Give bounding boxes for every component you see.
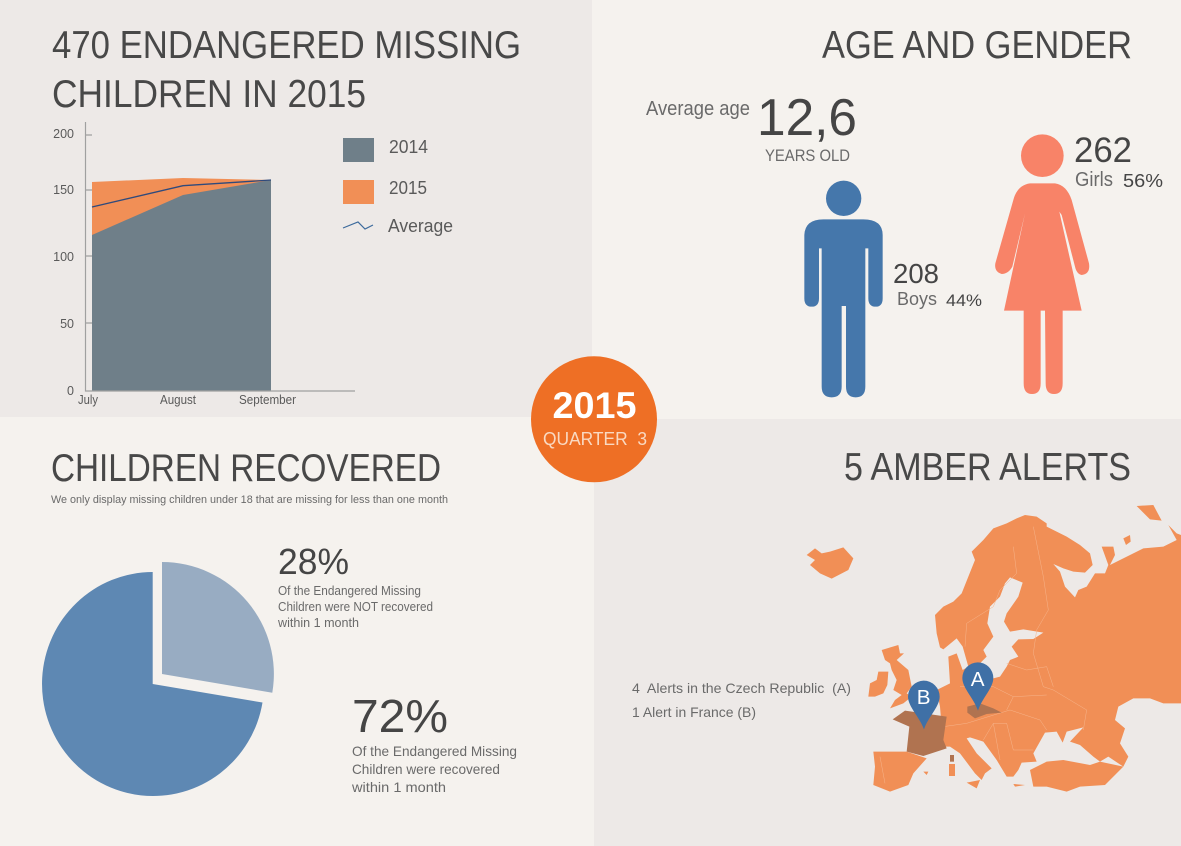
stat: 72 percent: 72% — [352, 690, 448, 742]
girls stats — [1074, 131, 1163, 191]
alerts list: 4 Alerts in the Czech Republic (A) — [632, 680, 851, 696]
boys stats: 44% — [946, 291, 982, 310]
highlighted countries — [893, 703, 1002, 762]
heading: endangered missing children: 470 ENDANGERED MISSING — [52, 24, 521, 67]
area chart: September — [239, 393, 296, 407]
stat: 28 percent: within 1 month — [277, 616, 359, 630]
heading: endangered missing children — [52, 24, 521, 116]
area chart: August — [160, 393, 196, 407]
chart legend — [343, 137, 453, 236]
map of Europe — [807, 505, 1181, 792]
badge: 2015 quarter 3 — [531, 356, 657, 482]
stat: 72 percent: within 1 month — [351, 779, 446, 795]
pie chart — [42, 562, 274, 796]
heading: children recovered: CHILDREN RECOVERED — [51, 447, 441, 490]
country borders — [880, 527, 1087, 783]
icon: boy figure — [804, 181, 883, 397]
girls stats: 262 — [1074, 131, 1132, 170]
badge: 2015 quarter 3: 2015 — [552, 385, 636, 426]
area chart: 50 — [60, 317, 74, 331]
average age: YEARS OLD — [765, 146, 850, 165]
average age: Average age — [646, 98, 750, 120]
panel: age and gender — [592, 0, 1181, 419]
chart legend: 2014 — [389, 137, 428, 157]
girls stats: 56% — [1123, 171, 1163, 191]
chart legend: 2015 — [389, 178, 427, 198]
pin B — [908, 681, 940, 729]
heading: amber alerts: 5 AMBER ALERTS — [844, 446, 1131, 489]
pin A: A — [971, 668, 985, 691]
area chart: 150 — [53, 183, 74, 197]
alerts list: 1 Alert in France (B) — [632, 704, 756, 720]
stat: 28 percent — [277, 541, 433, 630]
panel: amber alerts — [594, 419, 1181, 846]
subtitle: We only display missing children under 18 that are missing for less than one month — [51, 494, 448, 506]
average age: 12,6 — [757, 89, 857, 147]
girls stats: Girls — [1075, 169, 1113, 191]
alerts list — [632, 680, 851, 720]
chart legend: Average — [388, 216, 453, 236]
stat: 72 percent: Of the Endangered Missing — [352, 743, 517, 759]
panel: children recovered — [0, 417, 594, 846]
area chart: 0 — [67, 384, 74, 398]
seas — [977, 577, 1043, 680]
boys stats — [893, 258, 982, 310]
pin B: B — [917, 686, 931, 709]
stat: 28 percent: 28% — [278, 541, 349, 582]
area chart: 200 — [53, 127, 74, 141]
heading: age and gender: AGE AND GENDER — [822, 24, 1132, 67]
area chart: 100 — [53, 250, 74, 264]
pin A — [962, 662, 993, 711]
icon: girl figure — [995, 134, 1089, 394]
stat: 28 percent: Children were NOT recovered — [278, 600, 433, 614]
area chart: July — [78, 393, 99, 407]
average age — [646, 89, 857, 165]
heading: endangered missing children: CHILDREN IN 2015 — [52, 73, 366, 116]
badge: 2015 quarter 3: QUARTER 3 — [543, 429, 647, 449]
stat: 28 percent: Of the Endangered Missing — [278, 584, 421, 598]
boys stats: Boys — [897, 289, 937, 309]
area chart — [53, 122, 355, 407]
panel: endangered missing children — [0, 0, 592, 417]
stat: 72 percent: Children were recovered — [352, 761, 500, 777]
stat: 72 percent — [351, 690, 517, 795]
boys stats: 208 — [893, 258, 939, 289]
